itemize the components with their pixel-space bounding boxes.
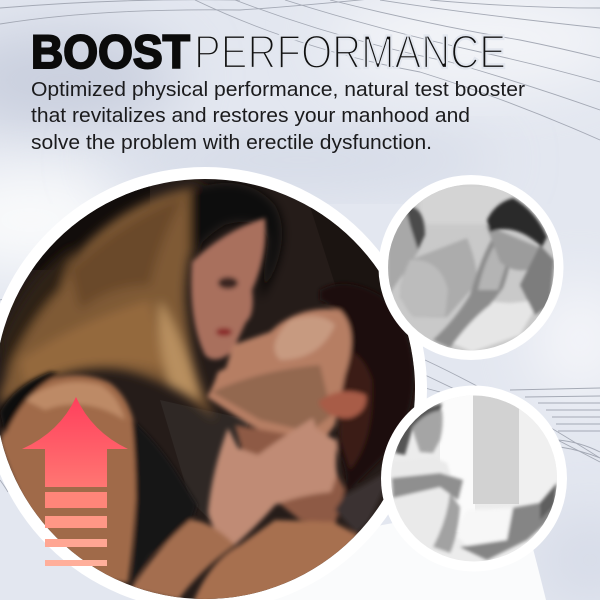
man face: [207, 309, 351, 445]
woman shoulder and arm: [0, 375, 137, 583]
top: [440, 460, 450, 529]
title: BOOST: BOOST: [31, 25, 190, 78]
neck: [235, 425, 345, 525]
man chest: [192, 520, 358, 600]
man hair: [320, 284, 414, 495]
description text: [31, 78, 525, 154]
ear: [318, 391, 366, 418]
title: PERFORMANCE: PERFORMANCE: [194, 25, 506, 78]
icon: red up arrow with fading bars: [22, 397, 128, 566]
title: [31, 25, 506, 78]
dark hair by face: [190, 183, 282, 300]
woman hair and face: [395, 403, 442, 455]
woman face tones: [191, 218, 265, 359]
arrow head and shaft: [22, 397, 128, 487]
lace top: [132, 420, 197, 585]
arms: [392, 473, 463, 500]
sheet: [457, 508, 513, 548]
hair: [0, 185, 215, 420]
hand: [208, 418, 337, 545]
description text: that revitalizes and restores your manhood and: [31, 104, 470, 127]
description text: solve the problem with erectile dysfunction.: [31, 131, 432, 154]
photo circle: bottom right: [381, 386, 567, 572]
main photo circle: [0, 167, 430, 600]
person lying: [460, 501, 552, 560]
photo circle: top right: [378, 175, 564, 360]
shirt: [414, 238, 478, 318]
forearm and hand: [433, 237, 513, 348]
woman forearm: [130, 520, 235, 600]
woman in background: [388, 214, 419, 292]
fading bars: [45, 492, 107, 566]
white backing shape: [150, 500, 546, 600]
head: [486, 226, 539, 272]
description text: Optimized physical performance, natural test booster: [31, 78, 525, 101]
